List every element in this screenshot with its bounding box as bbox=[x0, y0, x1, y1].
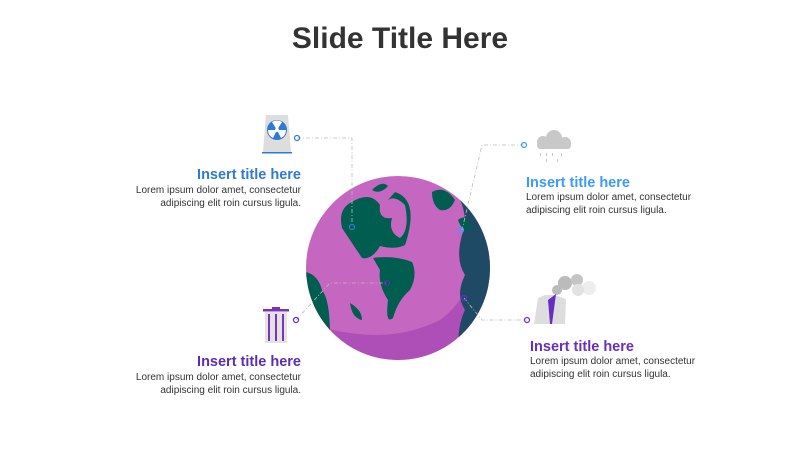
text: adipiscing elit roin cursus ligula. bbox=[530, 369, 671, 380]
text block: bottom-left bbox=[136, 354, 301, 396]
globe bbox=[306, 176, 490, 360]
text: Insert title here bbox=[530, 339, 634, 355]
title: Slide Title Here bbox=[292, 22, 508, 55]
text block: top-left bbox=[136, 167, 301, 209]
connector dots bbox=[294, 136, 530, 322]
icon: cloud rain bbox=[537, 130, 571, 162]
icon: trash bin bbox=[263, 307, 289, 343]
text: Lorem ipsum dolor amet, consectetur bbox=[136, 185, 301, 196]
text: adipiscing elit roin cursus ligula. bbox=[526, 205, 667, 216]
text: Lorem ipsum dolor amet, consectetur bbox=[530, 356, 695, 367]
text block: bottom-right bbox=[530, 339, 695, 380]
icon: nuclear plant bbox=[262, 115, 292, 154]
text: adipiscing elit roin cursus ligula. bbox=[160, 198, 301, 209]
text: Insert title here bbox=[197, 167, 301, 183]
graphic bbox=[262, 115, 596, 360]
icon: factory smoke bbox=[534, 274, 596, 324]
text: Insert title here bbox=[197, 354, 301, 370]
text block: top-right bbox=[526, 175, 691, 216]
text: Insert title here bbox=[526, 175, 630, 191]
connectors bbox=[296, 138, 527, 320]
text: adipiscing elit roin cursus ligula. bbox=[160, 385, 301, 396]
text: Lorem ipsum dolor amet, consectetur bbox=[526, 192, 691, 203]
text: Lorem ipsum dolor amet, consectetur bbox=[136, 372, 301, 383]
